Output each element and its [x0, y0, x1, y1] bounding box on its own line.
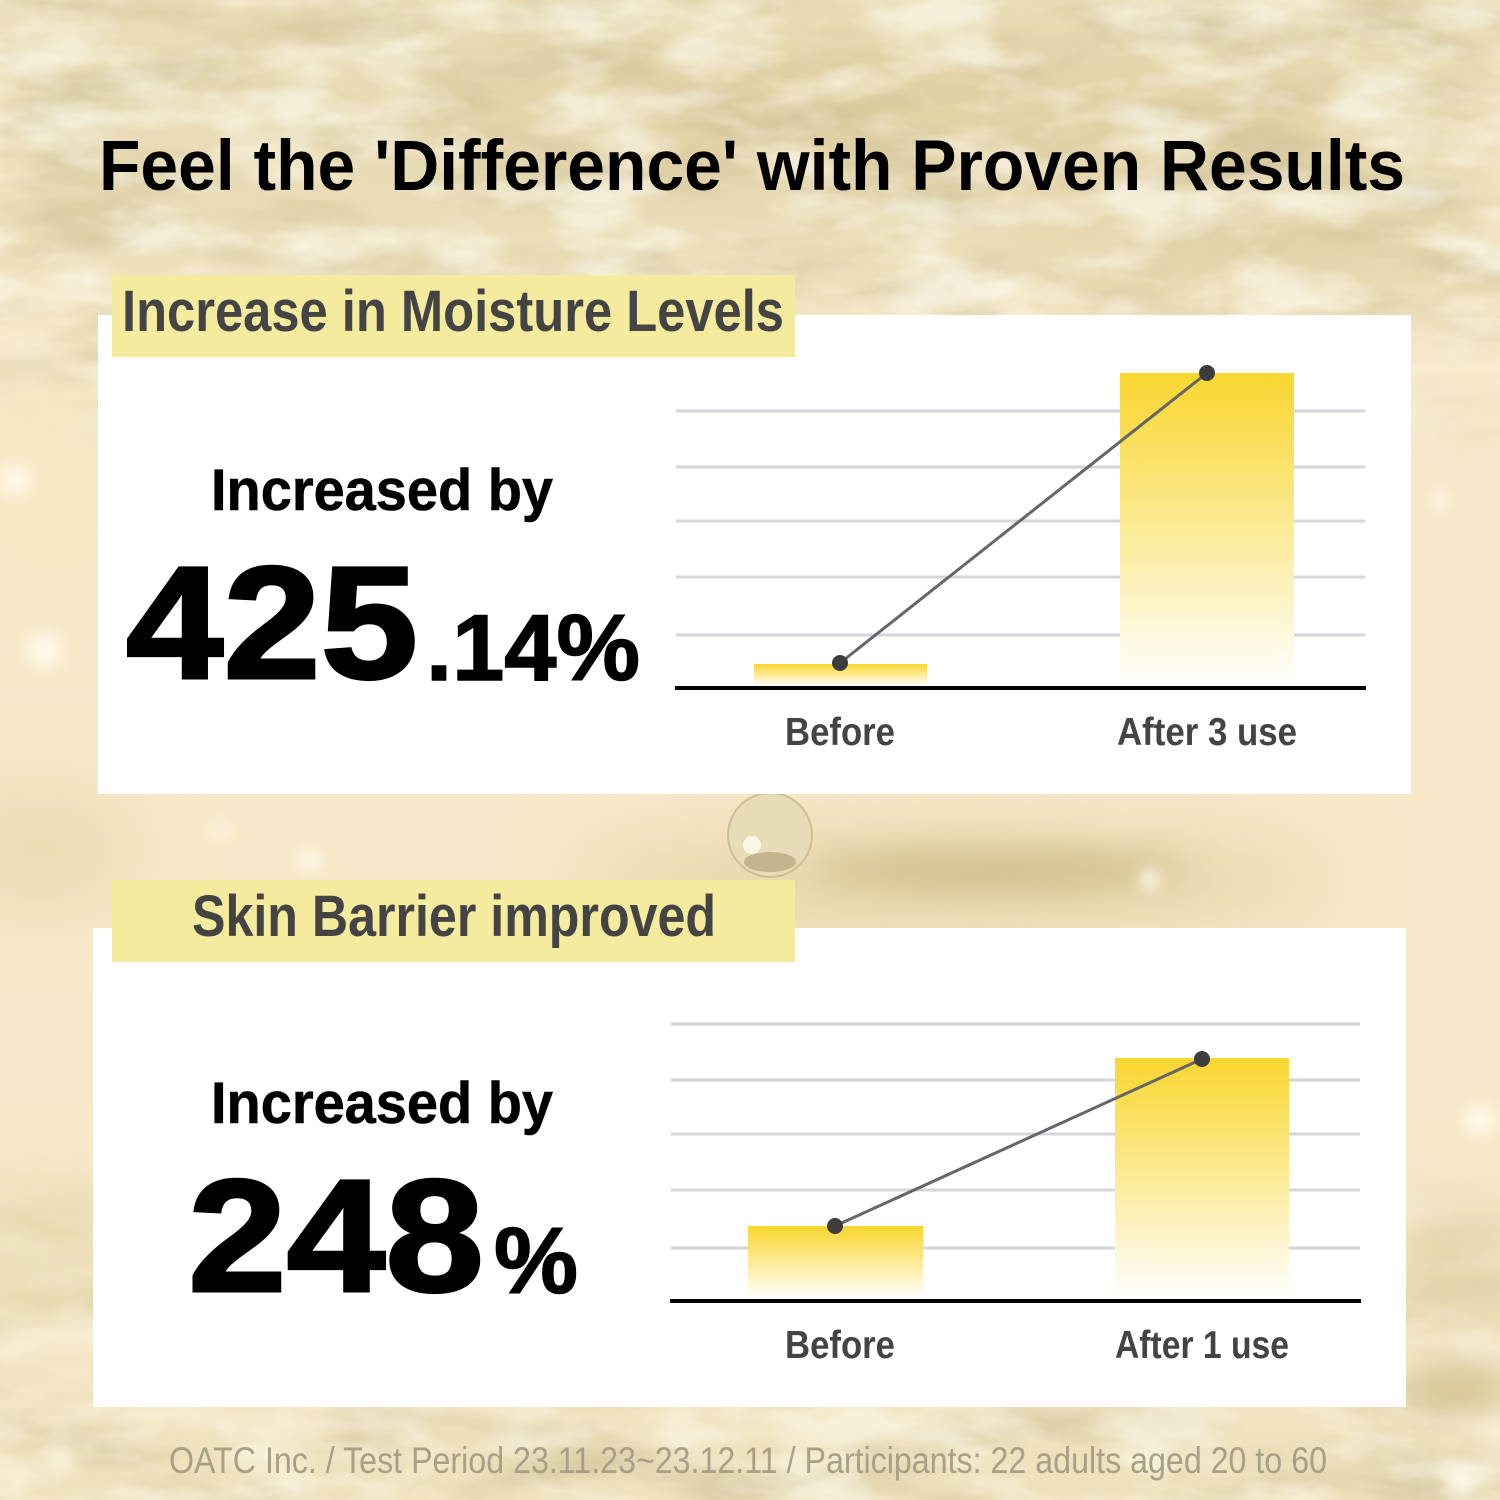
panel heading: skin barrier [112, 880, 795, 962]
stat: increased by 248% [188, 1071, 578, 1325]
stat: increased by 425.14%: 425 [126, 533, 418, 712]
stat: increased by 248%: Increased by [211, 1071, 553, 1136]
panel: moisture levels [98, 275, 1411, 794]
axis label: before: Before [785, 711, 895, 754]
stat: increased by 248%: 248 [188, 1146, 484, 1325]
axis label: after 3 use: After 3 use [1117, 711, 1297, 754]
footnote: OATC Inc. / Test Period 23.11.23~23.12.11 / Participants: 22 adults aged 20 to 60 [169, 1440, 1327, 1481]
bar chart: moisture [675, 365, 1366, 754]
droplet between panels [728, 793, 812, 877]
bar: after 3 use [1120, 373, 1294, 686]
bar: after 1 use [1115, 1058, 1289, 1299]
axis label: before: Before [785, 1324, 895, 1367]
bar chart: skin barrier [670, 1024, 1361, 1367]
panel heading: skin barrier: Skin Barrier improved [192, 884, 716, 949]
heading: Feel the 'Difference' with Proven Results [99, 127, 1405, 206]
panel: skin barrier [93, 880, 1406, 1407]
bar: before [748, 1226, 923, 1299]
stat: increased by 425.14% [126, 458, 640, 712]
stat: increased by 248%: % [494, 1208, 578, 1313]
trend line [832, 365, 1215, 671]
trend line [827, 1051, 1210, 1234]
stat: increased by 425.14%: .14% [426, 595, 640, 700]
panel heading: moisture: Increase in Moisture Levels [122, 279, 784, 344]
stat: increased by 425.14%: Increased by [211, 458, 553, 523]
bar: before [754, 664, 927, 686]
axis label: after 1 use: After 1 use [1115, 1324, 1289, 1367]
